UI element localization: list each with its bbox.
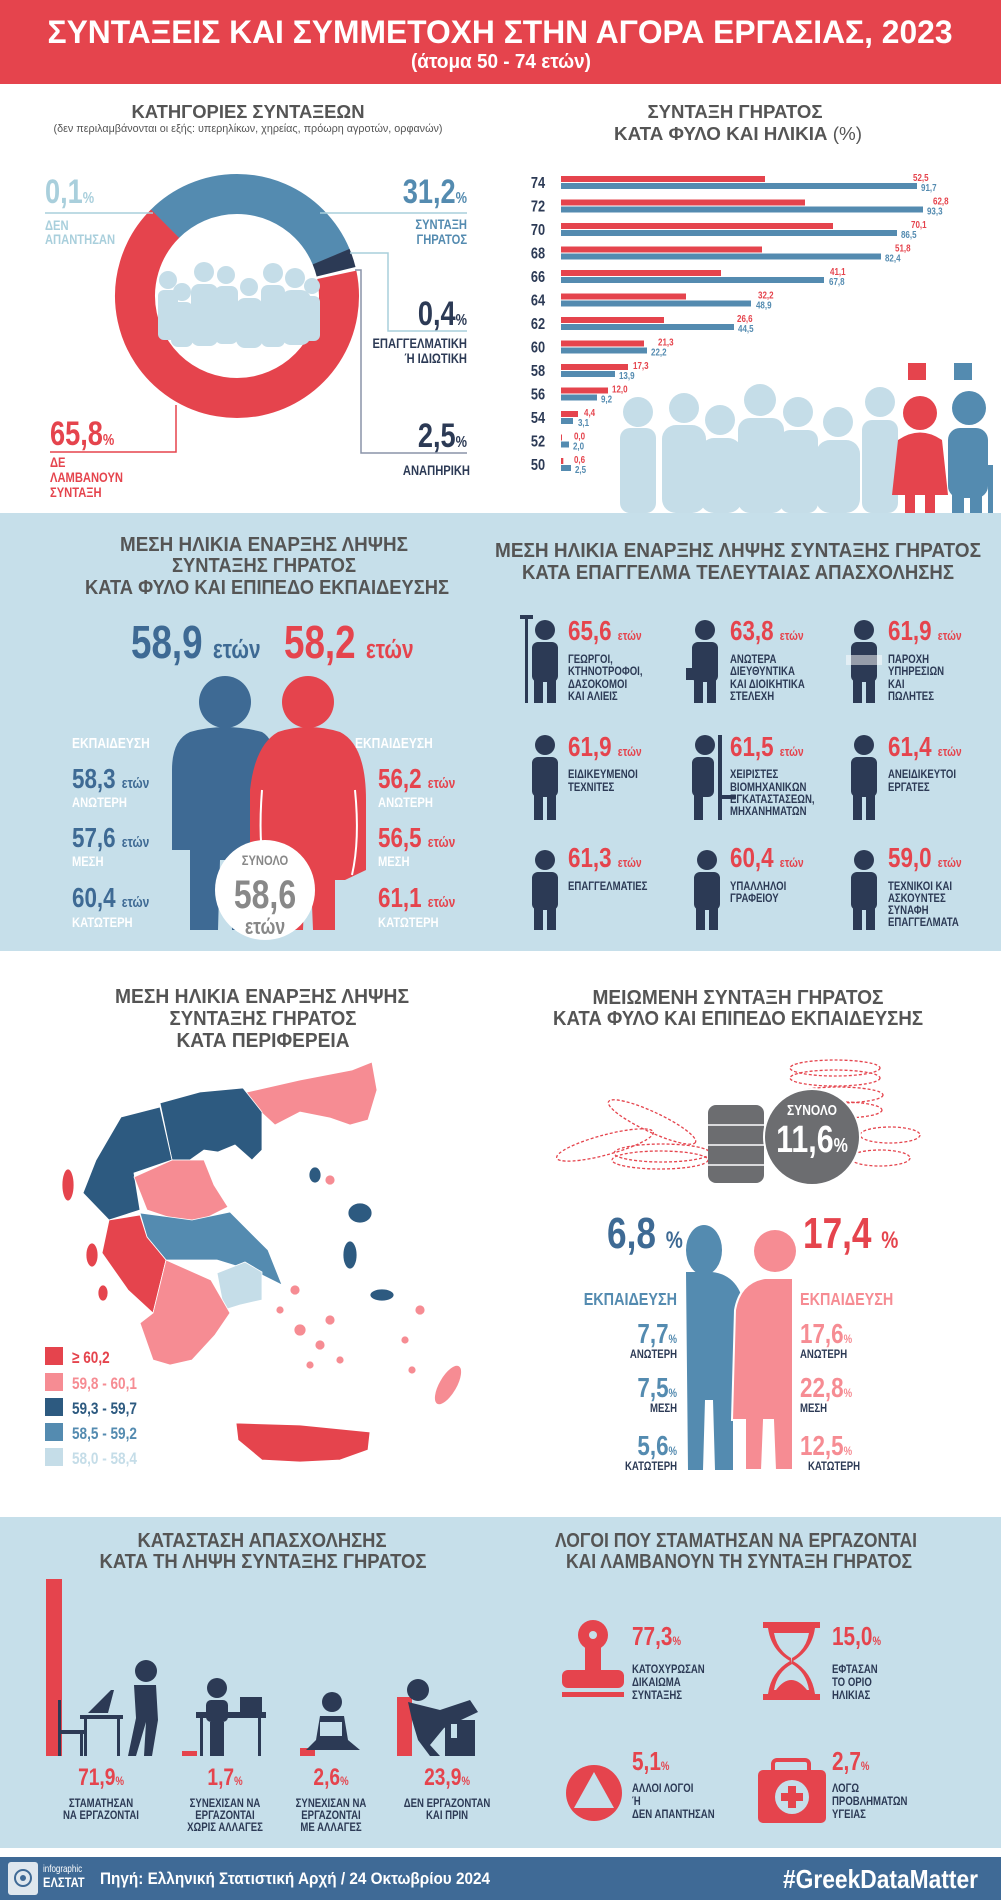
reasons values: ΠΡΟΒΛΗΜΑΤΩΝ xyxy=(832,1795,908,1808)
callout: 0,1% no answer: ΔΕΝ xyxy=(45,218,69,233)
bar chart: ages: 13,9 xyxy=(619,370,635,381)
bar chart: ages: 52,5 xyxy=(913,172,929,183)
callout: 31,2% old-age xyxy=(320,172,467,247)
bar chart: ages: 70 xyxy=(531,222,545,239)
callout: total 58,6: 58,6 xyxy=(234,872,296,917)
callout: 31,2% old-age: ΣΥΝΤΑΞΗ xyxy=(415,217,467,232)
heading: age by sex/education: ΜΕΣΗ ΗΛΙΚΙΑ ΕΝΑΡΞΗΣ ΛΗΨΗΣ xyxy=(120,534,408,556)
panel: age by region xyxy=(45,986,467,1468)
employment values: 1,7% xyxy=(207,1763,243,1791)
bar chart: ages: 0,0 xyxy=(574,431,585,442)
men education values: ΚΑΤΩΤΕΡΗ xyxy=(72,915,133,930)
heading: occupation xyxy=(495,540,981,584)
men education values xyxy=(72,735,150,930)
bar chart: ages: 91,7 xyxy=(921,182,937,193)
bar chart: ages: 62,8 xyxy=(933,196,949,207)
bar chart: ages xyxy=(531,172,949,475)
heading: reduced pension: ΜΕΙΩΜΕΝΗ ΣΥΝΤΑΞΗ ΓΗΡΑΤΟΣ xyxy=(592,987,884,1009)
bar chart: ages: 58 xyxy=(531,363,545,380)
occupation values: ΑΣΚΟΥΝΤΕΣ xyxy=(888,892,946,905)
heading: reduced pension xyxy=(553,987,923,1030)
bar chart: ages: 67,8 xyxy=(829,276,845,287)
women education reduced: ΕΚΠΑΙΔΕΥΣΗ xyxy=(800,1290,893,1309)
bar chart: ages: 2,0 xyxy=(573,441,584,452)
occupation values: ΥΠΗΡΕΣΙΩΝ xyxy=(888,665,944,678)
heading: age by sex/education xyxy=(85,534,449,599)
occupation values: ΤΕΧΝΙΤΕΣ xyxy=(568,781,615,794)
women education values: 56,2 ετών xyxy=(378,764,455,795)
occupation values: ΚΤΗΝΟΤΡΟΦΟΙ, xyxy=(568,665,642,678)
callout: 31,2% old-age: ΓΗΡΑΤΟΣ xyxy=(416,232,467,247)
callout: 65,8% no pension xyxy=(50,405,176,500)
panel: reasons for stopping work xyxy=(555,1530,917,1823)
bar chart: ages: 74 xyxy=(531,175,545,192)
bar chart: ages: 12,0 xyxy=(612,384,628,395)
icons: occupation figures xyxy=(520,615,882,930)
footer: Πηγή: Ελληνική Στατιστική Αρχή / 24 Οκτωβρίου 2024 xyxy=(100,1869,490,1888)
occupation values: ΧΕΙΡΙΣΤΕΣ xyxy=(730,768,779,781)
footer xyxy=(0,1857,1001,1900)
bar chart: ages: 44,5 xyxy=(738,323,754,334)
reasons values: ΥΓΕΙΑΣ xyxy=(832,1808,866,1821)
panel: pension categories xyxy=(45,102,470,500)
occupation values: 65,6 ετών xyxy=(568,616,642,647)
employment values: ΜΕ ΑΛΛΑΓΕΣ xyxy=(300,1821,362,1834)
header: ΣΥΝΤΑΞΕΙΣ ΚΑΙ ΣΥΜΜΕΤΟΧΗ ΣΤΗΝ ΑΓΟΡΑ ΕΡΓΑΣΙΑΣ, 2023 xyxy=(48,14,952,50)
icon: crowd inside donut xyxy=(158,262,320,348)
header: (άτομα 50 - 74 ετών) xyxy=(411,51,591,73)
men education reduced: 5,6% xyxy=(637,1431,677,1462)
bar chart: ages: 52 xyxy=(531,433,545,451)
icon: crowd of elderly xyxy=(620,384,898,513)
occupation values: 61,4 ετών xyxy=(888,732,962,763)
occupation values: 61,3 ετών xyxy=(568,843,642,874)
occupation values: ΓΡΑΦΕΙΟΥ xyxy=(730,892,779,905)
reasons values xyxy=(632,1622,908,1821)
men education values: ΕΚΠΑΙΔΕΥΣΗ xyxy=(72,735,150,751)
bar chart: ages: 48,9 xyxy=(756,300,772,311)
occupation values: ΑΝΕΙΔΙΚΕΥΤΟΙ xyxy=(888,768,956,781)
occupation values: 61,9 ετών xyxy=(568,732,642,763)
occupation values: ΚΑΙ xyxy=(888,678,905,691)
icon: man and woman xyxy=(686,1225,796,1470)
callout: total 58,6: ΣΥΝΟΛΟ xyxy=(242,853,288,868)
bar chart: ages: 64 xyxy=(531,292,545,310)
employment values: 71,9% xyxy=(78,1763,124,1791)
women average: 58,2 ετών xyxy=(284,616,414,668)
legend: map: ≥ 60,2 xyxy=(72,1349,110,1367)
bar chart: ages: 72 xyxy=(531,198,545,216)
callout: 31,2% old-age: 31,2% xyxy=(403,172,467,211)
reasons values: 15,0% xyxy=(832,1622,881,1651)
reasons values: 5,1% xyxy=(632,1747,670,1776)
bar chart: ages: 62 xyxy=(531,316,545,333)
bar chart: ages: 56 xyxy=(531,386,545,404)
legend: sex squares xyxy=(908,363,972,380)
occupation values: ΒΙΟΜΗΧΑΝΙΚΩΝ xyxy=(730,781,807,794)
occupation values: ΔΑΣΟΚΟΜΟΙ xyxy=(568,678,627,691)
bar chart: ages: 66 xyxy=(531,269,545,286)
reasons values: ΛΟΓΩ xyxy=(832,1782,859,1795)
icon: coins: 11,6% xyxy=(776,1119,848,1161)
men education reduced xyxy=(584,1290,677,1473)
women education reduced: ΚΑΤΩΤΕΡΗ xyxy=(808,1460,860,1473)
occupation values: 63,8 ετών xyxy=(730,616,804,647)
bar chart: ages: 54 xyxy=(531,410,545,427)
women education reduced: 17,6% xyxy=(800,1319,852,1350)
occupation values: ΕΓΚΑΤΑΣΤΑΣΕΩΝ, xyxy=(730,793,815,806)
occupation values: 61,5 ετών xyxy=(730,732,804,763)
women education reduced: 12,5% xyxy=(800,1431,852,1462)
occupation values: ΓΕΩΡΓΟΙ, xyxy=(568,653,613,666)
men education reduced: 7,7% xyxy=(637,1319,677,1350)
men education reduced: 7,5% xyxy=(637,1373,677,1404)
employment values: ΧΩΡΙΣ ΑΛΛΑΓΕΣ xyxy=(187,1821,263,1834)
bar chart: ages: 17,3 xyxy=(633,360,649,371)
occupation values: ΥΠΑΛΛΗΛΟΙ xyxy=(730,880,786,893)
callout: 0,4% occupational: Ή ΙΔΙΩΤΙΚΗ xyxy=(404,351,467,366)
women education values: ΜΕΣΗ xyxy=(378,854,410,869)
occupation values: ΚΑΙ ΑΛΙΕΙΣ xyxy=(568,690,618,703)
men education reduced: ΑΝΩΤΕΡΗ xyxy=(630,1348,677,1361)
men average: 58,9 ετών xyxy=(131,616,261,668)
women reduced total: 17,4 % xyxy=(803,1209,898,1258)
legend: map: 58,0 - 58,4 xyxy=(72,1450,137,1468)
heading: categories: ΚΑΤΗΓΟΡΙΕΣ ΣΥΝΤΑΞΕΩΝ xyxy=(132,102,364,122)
bar chart: ages: 70,1 xyxy=(911,219,927,230)
reasons values: 2,7% xyxy=(832,1747,870,1776)
callout: 65,8% no pension: ΛΑΜΒΑΝΟΥΝ xyxy=(50,470,123,485)
bar chart: ages: 51,8 xyxy=(895,243,911,254)
panel: employment status xyxy=(0,1517,1001,1848)
occupation values: ΤΕΧΝΙΚΟΙ ΚΑΙ xyxy=(888,880,952,893)
icon: ELSTAT logo xyxy=(8,1862,38,1895)
heading: age by sex/education: ΚΑΤΑ ΦΥΛΟ ΚΑΙ ΕΠΙΠΕΔΟ ΕΚΠΑΙΔΕΥΣΗΣ xyxy=(85,577,449,599)
men education values: ΑΝΩΤΕΡΗ xyxy=(72,795,127,810)
occupation values: ΕΡΓΑΤΕΣ xyxy=(888,781,930,794)
heading: employment status: ΚΑΤΑ ΤΗ ΛΗΨΗ ΣΥΝΤΑΞΗΣ ΓΗΡΑΤΟΣ xyxy=(100,1551,426,1573)
occupation values: 59,0 ετών xyxy=(888,843,962,874)
heading: reduced pension: ΚΑΤΑ ΦΥΛΟ ΚΑΙ ΕΠΙΠΕΔΟ ΕΚΠΑΙΔΕΥΣΗΣ xyxy=(553,1008,923,1030)
map: Greece regions xyxy=(62,1062,467,1462)
men reduced total: 6,8 % xyxy=(607,1209,683,1258)
occupation values: 61,9 ετών xyxy=(888,616,962,647)
callout: 65,8% no pension: ΔΕ xyxy=(50,455,66,470)
men education values: 60,4 ετών xyxy=(72,883,149,914)
occupation values: ΠΑΡΟΧΗ xyxy=(888,653,929,666)
employment values: ΚΑΙ ΠΡΙΝ xyxy=(426,1809,468,1822)
heading: categories xyxy=(54,102,442,135)
bar chart: ages: 22,2 xyxy=(651,347,667,358)
heading: region xyxy=(115,986,409,1052)
callout: 65,8% no pension: ΣΥΝΤΑΞΗ xyxy=(50,485,102,500)
icon: triangle in circle xyxy=(566,1765,622,1821)
heading: region: ΚΑΤΑ ΠΕΡΙΦΕΡΕΙΑ xyxy=(176,1030,350,1052)
heading: occupation: ΜΕΣΗ ΗΛΙΚΙΑ ΕΝΑΡΞΗΣ ΛΗΨΗΣ ΣΥΝΤΑΞΗΣ ΓΗΡΑΤΟΣ xyxy=(495,540,981,562)
callout: 0,1% no answer: ΑΠΑΝΤΗΣΑΝ xyxy=(45,232,115,247)
heading: reasons: ΚΑΙ ΛΑΜΒΑΝΟΥΝ ΤΗ ΣΥΝΤΑΞΗ ΓΗΡΑΤΟΣ xyxy=(566,1551,912,1573)
panel: age by occupation xyxy=(495,540,981,930)
bar chart: ages: 86,5 xyxy=(901,229,917,240)
icons: employment figures xyxy=(58,1660,478,1756)
footer: infographic xyxy=(43,1863,83,1874)
men education reduced: ΕΚΠΑΙΔΕΥΣΗ xyxy=(584,1290,677,1309)
occupation values: 60,4 ετών xyxy=(730,843,804,874)
heading: age by sex/education: ΣΥΝΤΑΞΗΣ ΓΗΡΑΤΟΣ xyxy=(172,555,356,577)
icon: stamp xyxy=(562,1620,624,1697)
callout: 2,5% disability: 2,5% xyxy=(418,416,467,455)
employment values: ΣΥΝΕΧΙΣΑΝ ΝΑ xyxy=(296,1797,366,1810)
reasons values: ΣΥΝΤΑΞΗΣ xyxy=(632,1689,682,1702)
women education values: 56,5 ετών xyxy=(378,823,455,854)
men education reduced: ΜΕΣΗ xyxy=(650,1402,677,1415)
heading: employment status: ΚΑΤΑΣΤΑΣΗ ΑΠΑΣΧΟΛΗΣΗΣ xyxy=(138,1530,386,1552)
occupation values: ΑΝΩΤΕΡΑ xyxy=(730,653,777,666)
callout: 2,5% disability: ΑΝΑΠΗΡΙΚΗ xyxy=(403,463,470,478)
heading: bar chart xyxy=(614,102,862,144)
icon: coins xyxy=(554,1060,920,1185)
footer: #GreekDataMatter xyxy=(783,1864,978,1894)
women education values: ΚΑΤΩΤΕΡΗ xyxy=(378,915,439,930)
bar chart: ages: 0,6 xyxy=(574,454,585,465)
bar chart: ages: 68 xyxy=(531,245,545,263)
icon: hourglass xyxy=(763,1622,820,1700)
heading: bar chart: ΚΑΤΑ ΦΥΛΟ ΚΑΙ ΗΛΙΚΙΑ (%) xyxy=(614,124,862,144)
panel: old-age pension by sex and age xyxy=(531,102,993,513)
women education reduced xyxy=(800,1290,893,1473)
heading: bar chart: ΣΥΝΤΑΞΗ ΓΗΡΑΤΟΣ xyxy=(648,102,823,122)
donut chart xyxy=(93,152,381,440)
men education values: 58,3 ετών xyxy=(72,764,149,795)
reasons values: ΑΛΛΟΙ ΛΟΓΟΙ xyxy=(632,1782,693,1795)
bar chart: ages: 2,5 xyxy=(575,464,586,475)
callout: total 58,6: ετών xyxy=(245,915,285,940)
bar chart: ages: 60 xyxy=(531,339,545,357)
icon: coins: ΣΥΝΟΛΟ xyxy=(787,1102,837,1118)
legend: map: 59,8 - 60,1 xyxy=(72,1375,137,1393)
occupation values xyxy=(568,616,962,929)
legend: map: 59,3 - 59,7 xyxy=(72,1400,137,1418)
icon: man figure xyxy=(172,676,276,930)
occupation values: ΜΗΧΑΝΗΜΑΤΩΝ xyxy=(730,805,807,818)
occupation values: ΕΠΑΓΓΕΛΜΑΤΑ xyxy=(888,916,959,929)
women education reduced: 22,8% xyxy=(800,1373,852,1404)
occupation values: ΕΙΔΙΚΕΥΜΕΝΟΙ xyxy=(568,768,638,781)
occupation values: ΣΤΕΛΕΧΗ xyxy=(730,690,774,703)
employment values: 23,9% xyxy=(424,1763,470,1791)
employment values: ΕΡΓΑΖΟΝΤΑΙ xyxy=(195,1809,255,1822)
heading: region: ΜΕΣΗ ΗΛΙΚΙΑ ΕΝΑΡΞΗΣ ΛΗΨΗΣ xyxy=(115,986,409,1008)
callout: 0,1% no answer xyxy=(45,172,153,247)
employment values: ΝΑ ΕΡΓΑΖΟΝΤΑΙ xyxy=(63,1809,139,1822)
bar chart: ages: 26,6 xyxy=(737,313,753,324)
callout: 0,4% occupational: 0,4% xyxy=(418,294,467,333)
callout: 2,5% disability xyxy=(355,270,470,478)
reasons values: ΤΟ ΟΡΙΟ xyxy=(832,1676,872,1689)
bar chart: employment xyxy=(46,1579,412,1756)
occupation values: ΠΩΛΗΤΕΣ xyxy=(888,690,934,703)
reasons values: ΔΕΝ ΑΠΑΝΤΗΣΑΝ xyxy=(632,1808,715,1821)
bar chart: ages: 21,3 xyxy=(658,337,674,348)
heading: region: ΣΥΝΤΑΞΗΣ ΓΗΡΑΤΟΣ xyxy=(170,1008,356,1030)
reasons values: Ή xyxy=(632,1795,641,1808)
icon: woman figure xyxy=(250,676,366,930)
heading: employment status xyxy=(100,1530,426,1573)
employment values: ΕΡΓΑΖΟΝΤΑΙ xyxy=(301,1809,361,1822)
men education reduced: ΚΑΤΩΤΕΡΗ xyxy=(625,1460,677,1473)
occupation values: ΕΠΑΓΓΕΛΜΑΤΙΕΣ xyxy=(568,880,648,893)
bar chart: ages: 50 xyxy=(531,457,545,474)
panel: average age by sex and education xyxy=(0,513,1001,951)
heading: categories: (δεν περιλαμβάνονται οι εξής: υπερηλίκων, χηρείας, πρόωρη αγροτών, ορφανών) xyxy=(54,123,442,135)
occupation values: ΔΙΕΥΘΥΝΤΙΚΑ xyxy=(730,665,795,678)
bar chart: ages: 32,2 xyxy=(758,290,774,301)
employment values xyxy=(63,1763,490,1834)
bar chart: ages: 3,1 xyxy=(578,417,589,428)
employment values: ΔΕΝ ΕΡΓΑΖΟΝΤΑΝ xyxy=(404,1797,490,1810)
heading: reasons: ΛΟΓΟΙ ΠΟΥ ΣΤΑΜΑΤΗΣΑΝ ΝΑ ΕΡΓΑΖΟΝΤΑΙ xyxy=(555,1530,917,1552)
heading: occupation: ΚΑΤΑ ΕΠΑΓΓΕΛΜΑ ΤΕΛΕΥΤΑΙΑΣ ΑΠΑΣΧΟΛΗΣΗΣ xyxy=(522,562,954,584)
heading: reasons xyxy=(555,1530,917,1573)
legend: map xyxy=(45,1347,137,1468)
bar chart: ages: 4,4 xyxy=(584,407,595,418)
reasons values: ΚΑΤΟΧΥΡΩΣΑΝ xyxy=(632,1663,705,1676)
panel: reduced pension xyxy=(553,987,923,1473)
reasons values: 77,3% xyxy=(632,1622,681,1651)
occupation values: ΣΥΝΑΦΗ xyxy=(888,904,929,917)
header xyxy=(0,0,1001,84)
callout: total 58,6 xyxy=(215,840,315,940)
men education values: 57,6 ετών xyxy=(72,823,149,854)
bar chart: ages: 93,3 xyxy=(927,206,943,217)
callout: 0,4% occupational xyxy=(350,253,467,366)
reasons values: ΕΦΤΑΣΑΝ xyxy=(832,1663,878,1676)
occupation values: ΚΑΙ ΔΙΟΙΚΗΤΙΚΑ xyxy=(730,678,805,691)
women education values: ΕΚΠΑΙΔΕΥΣΗ xyxy=(355,735,433,751)
bar chart: ages: 41,1 xyxy=(830,266,846,277)
reasons values: ΔΙΚΑΙΩΜΑ xyxy=(632,1676,681,1689)
reasons values: ΗΛΙΚΙΑΣ xyxy=(832,1689,871,1702)
employment values: ΣΤΑΜΑΤΗΣΑΝ xyxy=(69,1797,133,1810)
callout: 65,8% no pension: 65,8% xyxy=(50,414,114,453)
icon: man blue xyxy=(948,391,993,513)
callout: 0,1% no answer: 0,1% xyxy=(45,172,94,211)
women education reduced: ΑΝΩΤΕΡΗ xyxy=(800,1348,847,1361)
women education values: ΑΝΩΤΕΡΗ xyxy=(378,795,433,810)
employment values: ΣΥΝΕΧΙΣΑΝ ΝΑ xyxy=(190,1797,260,1810)
women education reduced: ΜΕΣΗ xyxy=(800,1402,827,1415)
employment values: 2,6% xyxy=(313,1763,349,1791)
callout: 0,4% occupational: ΕΠΑΓΓΕΛΜΑΤΙΚΗ xyxy=(372,336,467,351)
men education values: ΜΕΣΗ xyxy=(72,854,104,869)
bar chart: ages: 9,2 xyxy=(601,394,612,405)
women education values: 61,1 ετών xyxy=(378,883,455,914)
legend: map: 58,5 - 59,2 xyxy=(72,1425,137,1443)
footer: ΕΛΣΤΑΤ xyxy=(43,1875,85,1890)
icon: first aid kit xyxy=(758,1760,826,1823)
bar chart: ages: 82,4 xyxy=(885,253,901,264)
women education values xyxy=(355,735,455,930)
icon: woman red xyxy=(892,396,948,513)
